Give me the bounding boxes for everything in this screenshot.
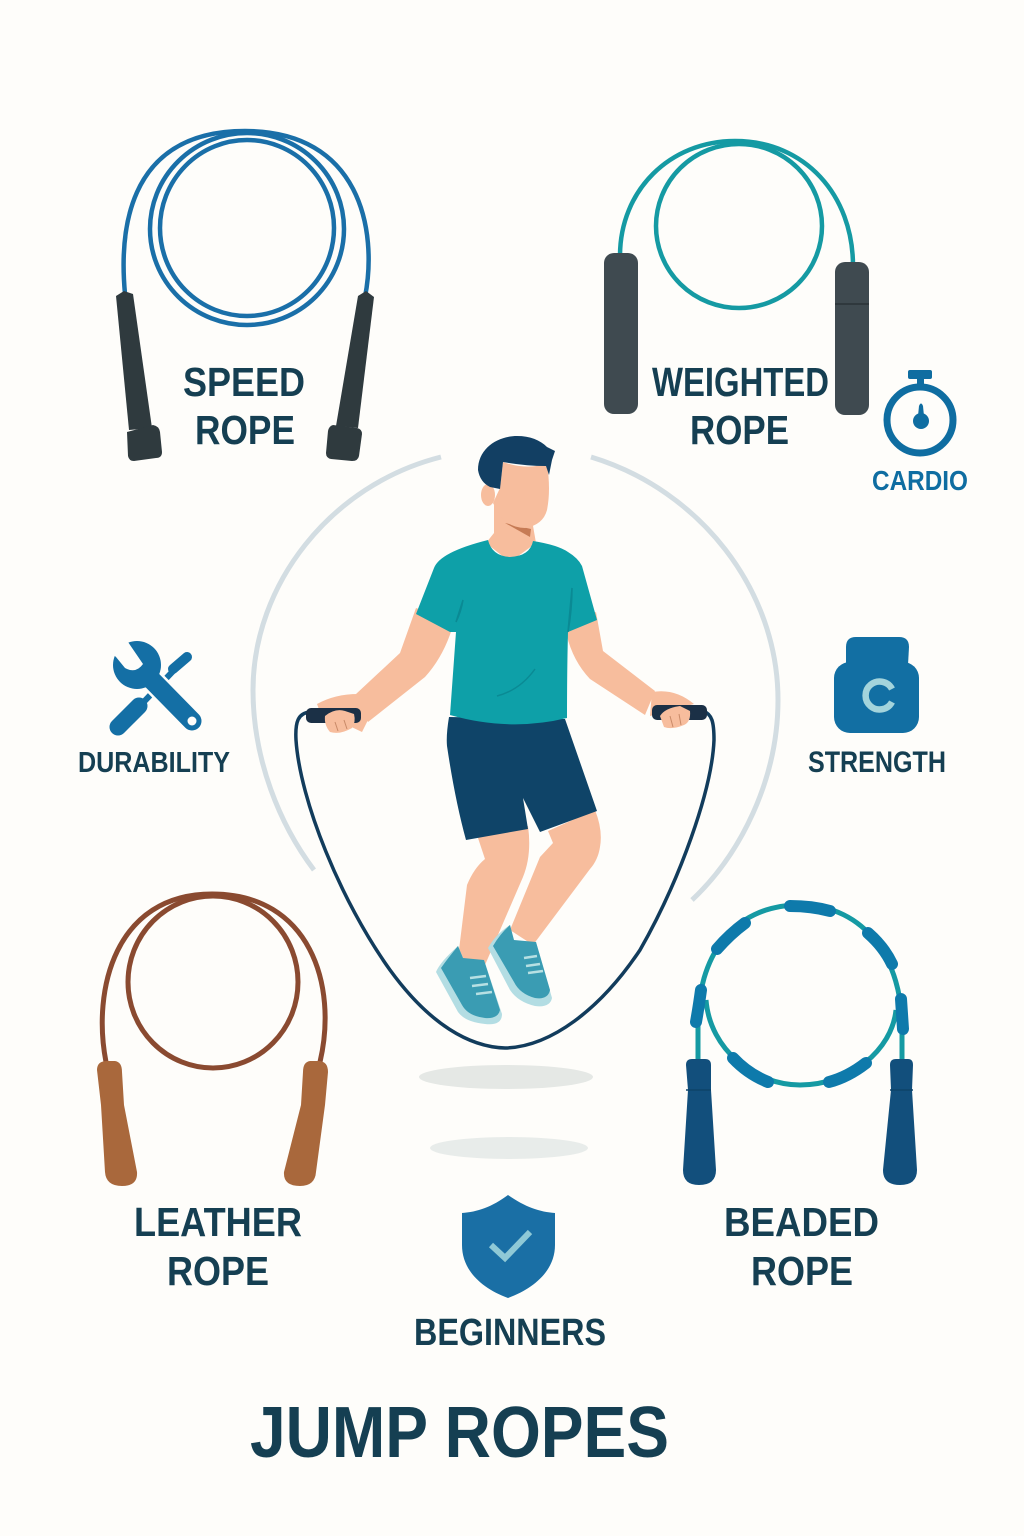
figure: left shoe bbox=[436, 946, 502, 1024]
figure: neck and shirt bbox=[416, 505, 597, 724]
icon: cardio stopwatch bbox=[887, 370, 953, 453]
label: speed rope bbox=[183, 359, 305, 453]
title: JUMP ROPES bbox=[250, 1393, 669, 1473]
arc: left motion arc bbox=[253, 457, 441, 870]
label: strength: STRENGTH bbox=[808, 746, 946, 779]
figure: right handle and hand bbox=[652, 705, 707, 728]
label: leather rope bbox=[134, 1199, 302, 1294]
figure: shorts bbox=[447, 717, 597, 840]
panel: speed rope bbox=[116, 131, 374, 461]
icon: leather rope right handle bbox=[284, 1061, 328, 1186]
panel: beaded rope bbox=[683, 905, 917, 1294]
label: speed rope: SPEED bbox=[183, 359, 305, 405]
icon: weighted rope left handle bbox=[604, 253, 638, 414]
icon: beginners shield bbox=[462, 1195, 555, 1298]
rope: beaded rope cord bbox=[698, 905, 902, 1085]
icon: durability wrench and screwdriver bbox=[108, 638, 196, 727]
rope: weighted rope loops bbox=[620, 141, 853, 308]
label: durability: DURABILITY bbox=[78, 747, 230, 779]
label: speed rope: ROPE bbox=[195, 407, 295, 453]
figure: right shoe bbox=[488, 925, 552, 1006]
panel: leather rope bbox=[97, 894, 328, 1294]
shadow: upper ground shadow bbox=[419, 1065, 593, 1089]
figure: left handle and hand bbox=[306, 708, 361, 733]
rope: speed rope loops bbox=[124, 131, 369, 325]
icon: leather rope left handle bbox=[97, 1061, 137, 1186]
label: beginners: BEGINNERS bbox=[414, 1312, 606, 1354]
label: beaded rope bbox=[724, 1199, 879, 1294]
label: cardio: CARDIO bbox=[872, 465, 968, 496]
icon: beaded rope right handle bbox=[883, 1059, 917, 1185]
illustration: jumping man bbox=[296, 436, 714, 1048]
icon: beaded rope left handle bbox=[683, 1059, 716, 1185]
label: beaded rope: ROPE bbox=[751, 1248, 853, 1294]
label: weighted rope: WEIGHTED bbox=[652, 359, 829, 405]
arc: right motion arc bbox=[591, 457, 778, 900]
rope: leather rope loops bbox=[102, 894, 325, 1068]
icon: strength weight bbox=[834, 637, 919, 733]
icon: weighted rope right handle bbox=[835, 262, 869, 415]
icon: speed rope left handle bbox=[116, 291, 162, 461]
beads: rope beads bbox=[696, 906, 903, 1082]
label: weighted rope: ROPE bbox=[690, 407, 789, 453]
label: weighted rope bbox=[652, 359, 829, 453]
figure: legs bbox=[458, 810, 601, 965]
figure: arms bbox=[317, 608, 694, 732]
panel: weighted rope bbox=[604, 141, 869, 453]
label: leather rope: LEATHER bbox=[134, 1199, 302, 1245]
rope: man's jump rope bbox=[296, 711, 714, 1048]
label: beaded rope: BEADED bbox=[724, 1199, 879, 1245]
shadow: lower ground shadow bbox=[430, 1137, 588, 1159]
icon: speed rope right handle bbox=[326, 291, 374, 461]
label: leather rope: ROPE bbox=[167, 1248, 269, 1294]
figure: head and hair bbox=[478, 436, 555, 528]
